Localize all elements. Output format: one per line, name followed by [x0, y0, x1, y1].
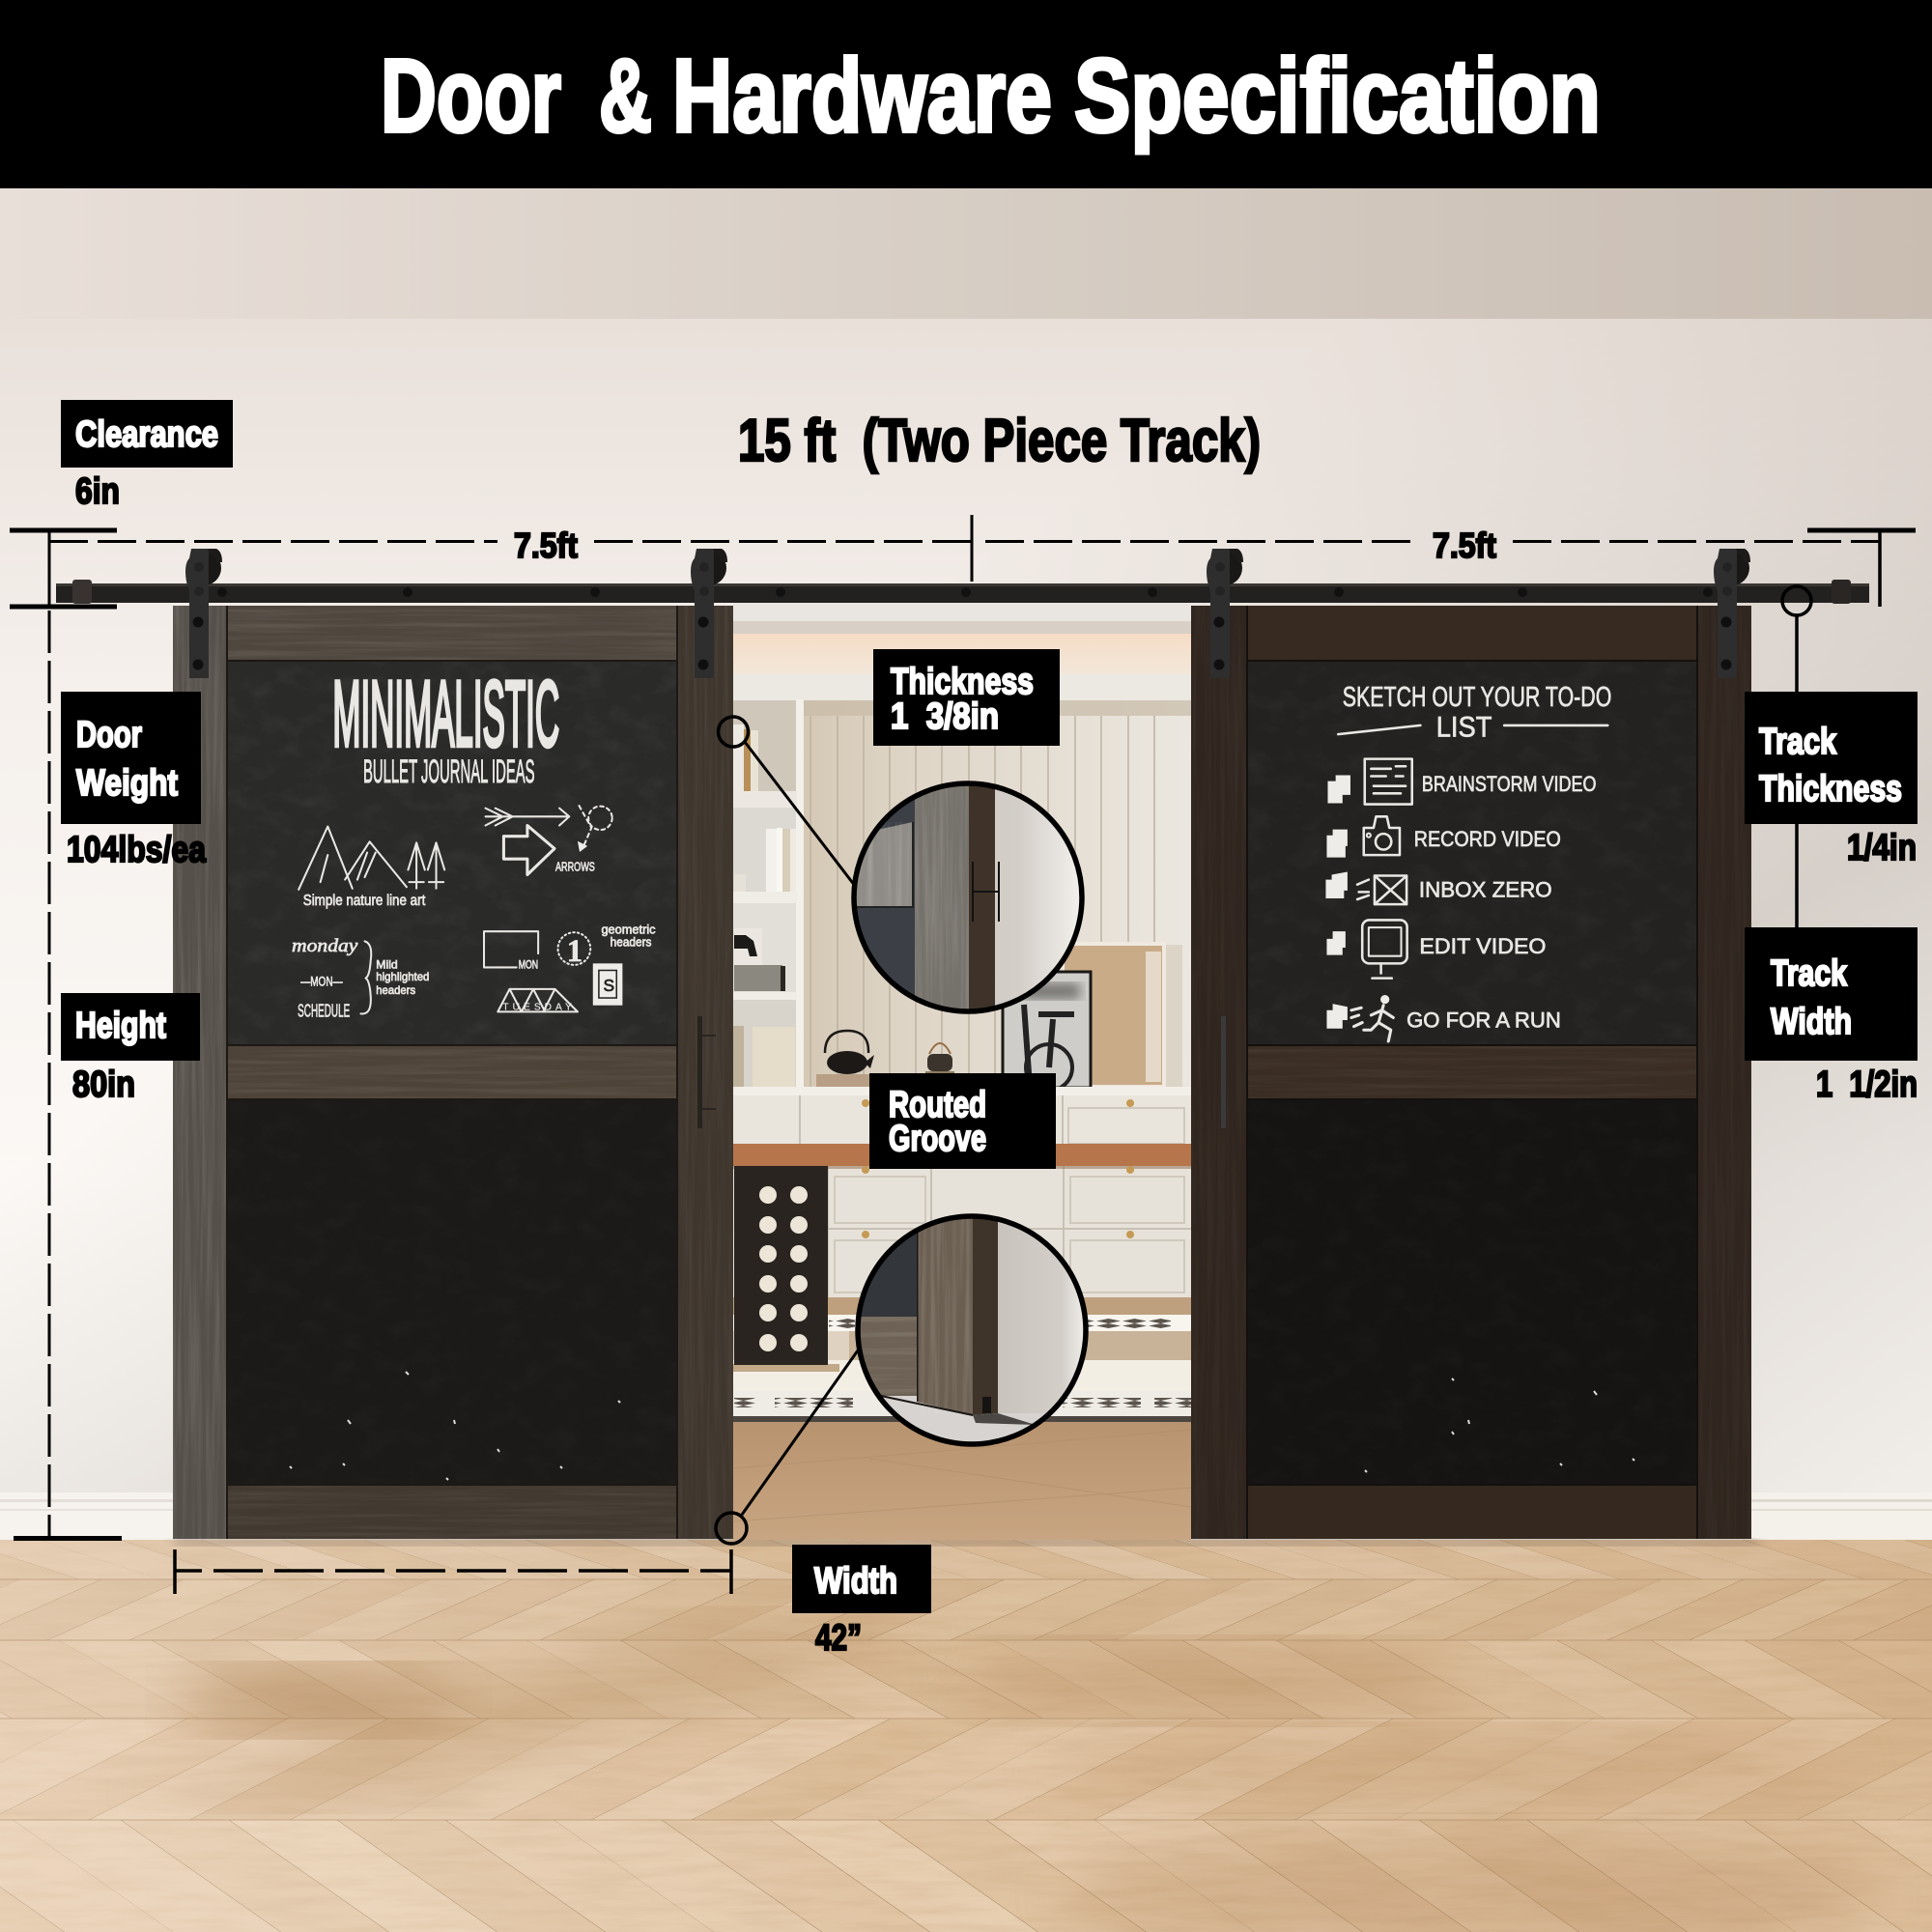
chalk drawings: minimalistic bullet journal ideas: MINIMALISTIC [332, 661, 559, 766]
magnified circle: door thickness [850, 778, 1092, 1019]
clearance bracket [10, 530, 117, 607]
bookshelf [733, 699, 804, 1089]
cabinets and counter [733, 1087, 1191, 1298]
track end stopper left [72, 580, 92, 604]
chalk geometric headers: 1 [567, 934, 582, 969]
chalk geometric headers: MON [519, 957, 538, 971]
callout: track thickness: 1/4in [1847, 828, 1917, 868]
chalk geometric headers: geometric [601, 923, 656, 937]
to-do item: edit video: EDIT VIDEO [1419, 934, 1547, 958]
to-do item: brainstorm video: BRAINSTORM VIDEO [1422, 772, 1597, 796]
chalk mountains and trees [298, 827, 444, 909]
callout: track thickness [1745, 692, 1918, 868]
chalk geometric headers: S [603, 976, 614, 995]
wall and ceiling background [0, 188, 1932, 1546]
to-do item: go for a run [1326, 995, 1561, 1041]
callout: width: Width [814, 1561, 897, 1602]
callout: clearance [61, 400, 233, 512]
chalk highlighted headers [292, 936, 430, 1020]
callout: track width [1745, 927, 1918, 1105]
teapots [816, 1031, 954, 1087]
artwork frames [1003, 944, 1182, 1091]
track end stopper right [1832, 580, 1851, 604]
title: & [599, 37, 652, 154]
chalk highlighted headers: highlighted [376, 970, 430, 983]
callout: clearance: 6in [75, 471, 120, 512]
right end bracket [1807, 530, 1916, 607]
door hangers [185, 549, 1750, 678]
chalk geometric headers [484, 923, 656, 1012]
chalkboard panels [1248, 661, 1696, 1485]
leader line: track thickness [1782, 586, 1811, 927]
callout: clearance: Clearance [75, 414, 218, 455]
title: Hardware [672, 37, 1052, 154]
callout: door weight: 104lbs/ea [67, 830, 207, 870]
title bar [0, 0, 1932, 188]
chalk mountains and trees: Simple nature line art [303, 893, 426, 909]
to-do item: inbox zero: INBOX ZERO [1419, 877, 1552, 901]
title: Specification [1074, 37, 1601, 154]
chalk geometric headers: headers [611, 934, 651, 949]
chalk geometric headers: TUESDAY [502, 1002, 572, 1012]
to-do item: go for a run: GO FOR A RUN [1406, 1009, 1561, 1033]
herringbone wood floor [0, 1539, 1932, 1932]
leader line: routed groove [716, 1350, 858, 1544]
to-do item: inbox zero [1325, 871, 1552, 904]
interior view through the opening [733, 603, 1192, 1540]
callout: routed groove: Groove [889, 1119, 986, 1159]
callout: routed groove [869, 1073, 1056, 1169]
callout: thickness: Thickness [891, 662, 1034, 702]
callout: thickness [873, 649, 1060, 746]
callout: door weight: Weight [76, 763, 178, 804]
leader line: thickness [719, 717, 855, 886]
callout: width [792, 1545, 931, 1659]
door handle [1221, 1016, 1226, 1128]
door handle [697, 1016, 716, 1128]
chalk list heading: LIST [1436, 712, 1492, 744]
callout: track thickness: Track [1759, 722, 1837, 762]
callout: width: 42” [815, 1618, 862, 1659]
chalk drawings: minimalistic bullet journal ideas [292, 661, 656, 1020]
panel: right sliding door [1191, 606, 1751, 1539]
chalk list heading [1338, 682, 1611, 744]
chalk highlighted headers: —MON— [300, 974, 343, 989]
to-do item: record video [1326, 816, 1561, 858]
width dimension line [175, 1549, 731, 1594]
to-do item: record video: RECORD VIDEO [1414, 827, 1561, 851]
callout: height [61, 993, 200, 1105]
track length heading: 15 ft (Two Piece Track) [738, 408, 1261, 474]
barn door track rail [56, 580, 1869, 604]
callout: door weight [61, 692, 207, 870]
title [381, 37, 1601, 154]
callout: track width: Width [1771, 1002, 1852, 1042]
magnified circle: routed groove [855, 1212, 1092, 1449]
callout: height: 80in [72, 1065, 135, 1105]
chalk arrows: ARROWS [555, 859, 595, 873]
dimension: 7.5ft left span: 7.5ft [514, 526, 578, 565]
centre tick mark [970, 515, 974, 582]
to-do item: edit video [1326, 920, 1547, 979]
chalkboard panels [228, 661, 676, 1485]
callout: track width: Track [1771, 953, 1848, 994]
chalk highlighted headers: monday [292, 936, 358, 956]
callout: thickness: 1 3/8in [891, 696, 999, 737]
dimension: 7.5ft right span: 7.5ft [1433, 526, 1496, 565]
callout: door weight: Door [76, 715, 142, 755]
chalk highlighted headers: headers [376, 983, 415, 997]
panel: left sliding door [173, 606, 733, 1539]
height dimension line [14, 611, 122, 1538]
callout: height: Height [75, 1006, 166, 1046]
chalk drawings: to-do list [1325, 682, 1611, 1041]
rug and inner floor [733, 1297, 1192, 1540]
chalk highlighted headers: Mild [376, 957, 398, 971]
to-do item: brainstorm video [1327, 759, 1597, 805]
chalk list heading: SKETCH OUT YOUR TO-DO [1343, 682, 1611, 713]
title: Door [381, 37, 561, 154]
chalk drawings: minimalistic bullet journal ideas: BULLET JOURNAL IDEAS [363, 753, 535, 790]
chalk arrows [486, 806, 612, 875]
callout: routed groove: Routed [889, 1085, 986, 1125]
perforated black panel [734, 1166, 828, 1365]
chalk highlighted headers: SCHEDULE [298, 1000, 350, 1020]
